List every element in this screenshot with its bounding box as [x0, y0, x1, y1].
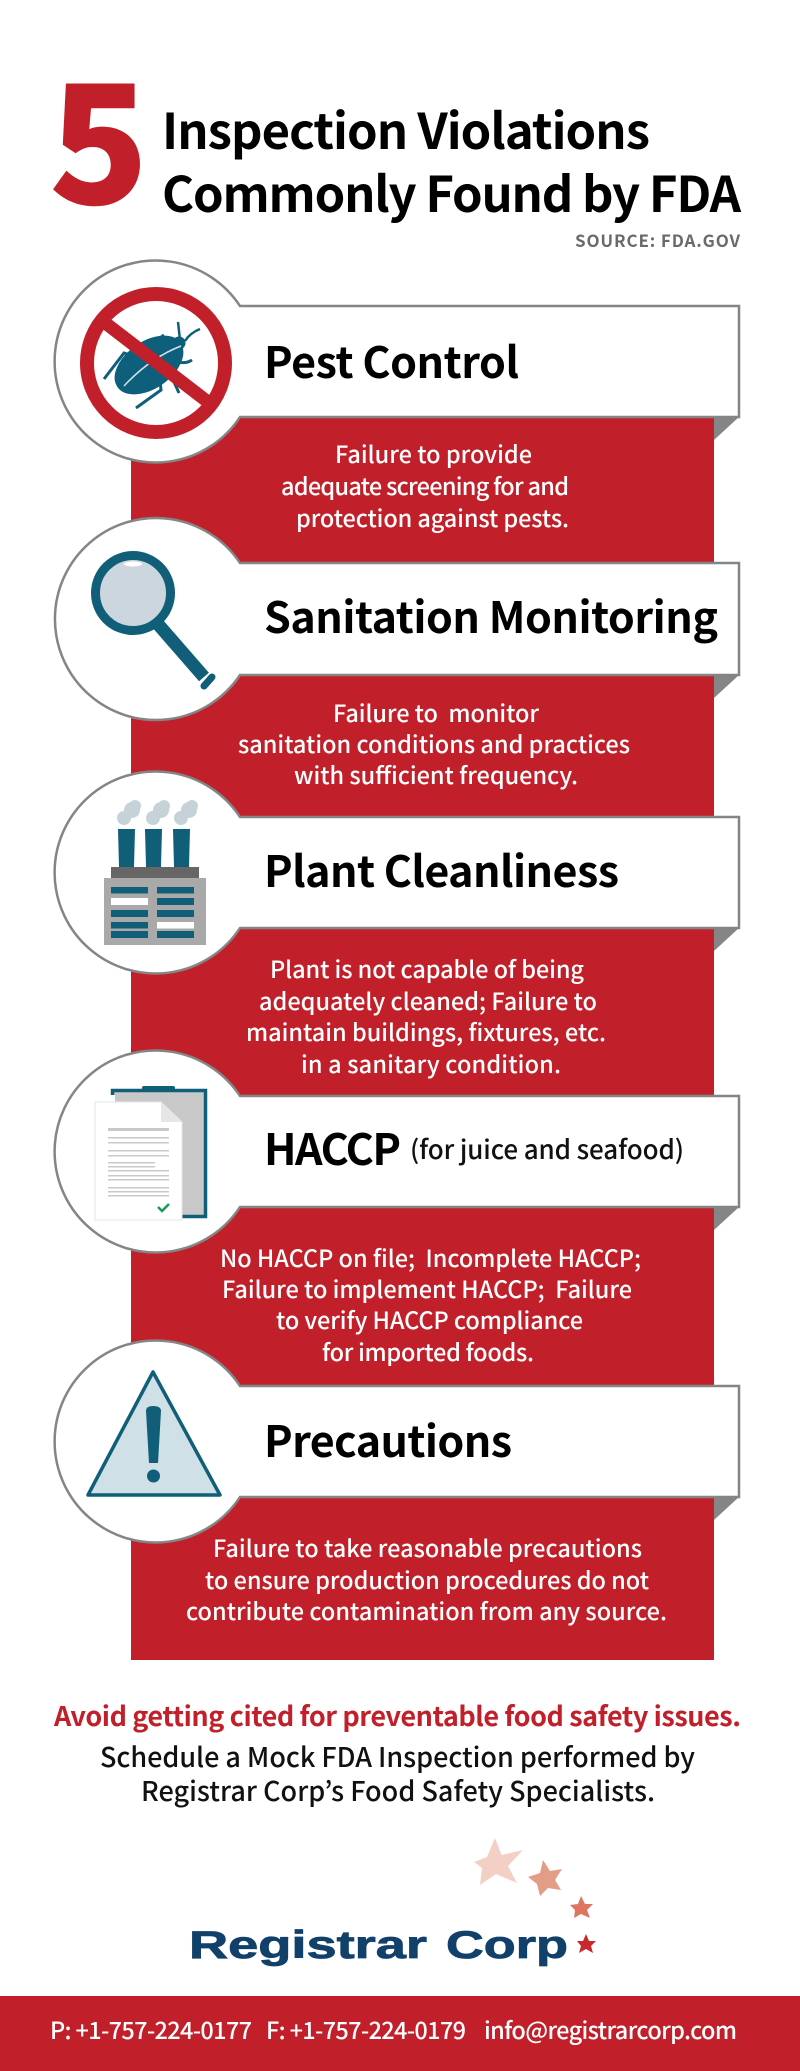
- heading banner: [55, 518, 739, 720]
- title line 2: Commonly Found by FDA: [162, 156, 742, 227]
- footer contact bar: [0, 1996, 800, 2071]
- icon: no pests: [87, 294, 225, 432]
- icon: magnifying glass: [96, 556, 212, 686]
- heading banner: [55, 1340, 739, 1542]
- heading: Precautions: [264, 1408, 512, 1470]
- description: Failure to take reasonable precautions: [213, 1530, 642, 1564]
- panel: pest control: [55, 260, 739, 534]
- description: Failure to implement HACCP; Failure: [222, 1271, 632, 1305]
- description: [220, 1240, 641, 1368]
- description: [281, 436, 569, 534]
- heading banner: [55, 260, 739, 462]
- footer contact bar: F: +1-757-224-0179: [266, 2012, 466, 2046]
- heading: HACCP: [264, 1116, 401, 1178]
- description: adequate screening for and: [281, 468, 569, 502]
- red lead line: Avoid getting cited for preventable food safety issues.: [53, 1695, 741, 1734]
- panel: plant cleanliness: [55, 772, 739, 1080]
- red backing column: [131, 410, 714, 1660]
- icon: warning triangle: [88, 1372, 220, 1495]
- panel: precautions: [55, 1340, 739, 1627]
- source note: SOURCE: FDA.GOV: [575, 227, 740, 252]
- call to action: [53, 1695, 741, 1809]
- big number 5: 5: [49, 11, 149, 252]
- heading: Pest Control: [264, 329, 519, 391]
- description: for imported foods.: [322, 1334, 534, 1368]
- description: [246, 951, 606, 1080]
- wordmark: Registrar: [189, 1924, 427, 1967]
- description: in a sanitary condition.: [301, 1046, 561, 1080]
- prohibition slash: [104, 322, 208, 402]
- description: Failure to monitor: [333, 695, 539, 729]
- heading banner: [55, 1050, 739, 1252]
- panel: sanitation monitoring: [55, 518, 739, 791]
- description: Failure to provide: [335, 436, 532, 470]
- fold: [714, 1207, 739, 1230]
- heading: Sanitation Monitoring: [264, 584, 718, 646]
- logo: Registrar Corp: [189, 1838, 596, 1967]
- heading: Plant Cleanliness: [264, 838, 619, 900]
- title block: [49, 11, 742, 252]
- description: maintain buildings, fixtures, etc.: [246, 1014, 606, 1048]
- icon: clipboard with document: [95, 1086, 206, 1220]
- heading: (for juice and seafood): [410, 1130, 684, 1167]
- description: protection against pests.: [296, 500, 569, 534]
- description: sanitation conditions and practices: [238, 726, 630, 760]
- black line 2: Registrar Corp’s Food Safety Specialists.: [141, 1770, 655, 1809]
- prohibition ring: [87, 294, 225, 432]
- fold: [714, 1497, 739, 1520]
- description: to ensure production procedures do not: [205, 1562, 649, 1596]
- logo: Registrar Corp: Corp: [446, 1924, 568, 1967]
- bug: [104, 322, 200, 408]
- description: No HACCP on file; Incomplete HACCP;: [220, 1240, 641, 1274]
- title line 1: Inspection Violations: [162, 93, 650, 164]
- heading: [264, 1116, 684, 1178]
- fold: [714, 675, 739, 698]
- heading banner: [55, 772, 739, 974]
- footer contact bar: info@registrarcorp.com: [484, 2012, 737, 2046]
- black line 1: Schedule a Mock FDA Inspection performed by: [100, 1736, 695, 1775]
- description: contribute contamination from any source.: [186, 1593, 667, 1627]
- stars: [474, 1838, 596, 1953]
- fold: [714, 417, 739, 440]
- description: Plant is not capable of being: [270, 951, 584, 985]
- panel: HACCP: [55, 1050, 739, 1368]
- description: [238, 695, 630, 791]
- icon: factory: [104, 800, 206, 945]
- description: [186, 1530, 667, 1627]
- footer contact bar: P: +1-757-224-0177: [50, 2012, 252, 2046]
- description: adequately cleaned; Failure to: [259, 983, 597, 1017]
- description: with sufficient frequency.: [294, 757, 578, 791]
- fold: [714, 928, 739, 951]
- description: to verify HACCP compliance: [276, 1302, 583, 1336]
